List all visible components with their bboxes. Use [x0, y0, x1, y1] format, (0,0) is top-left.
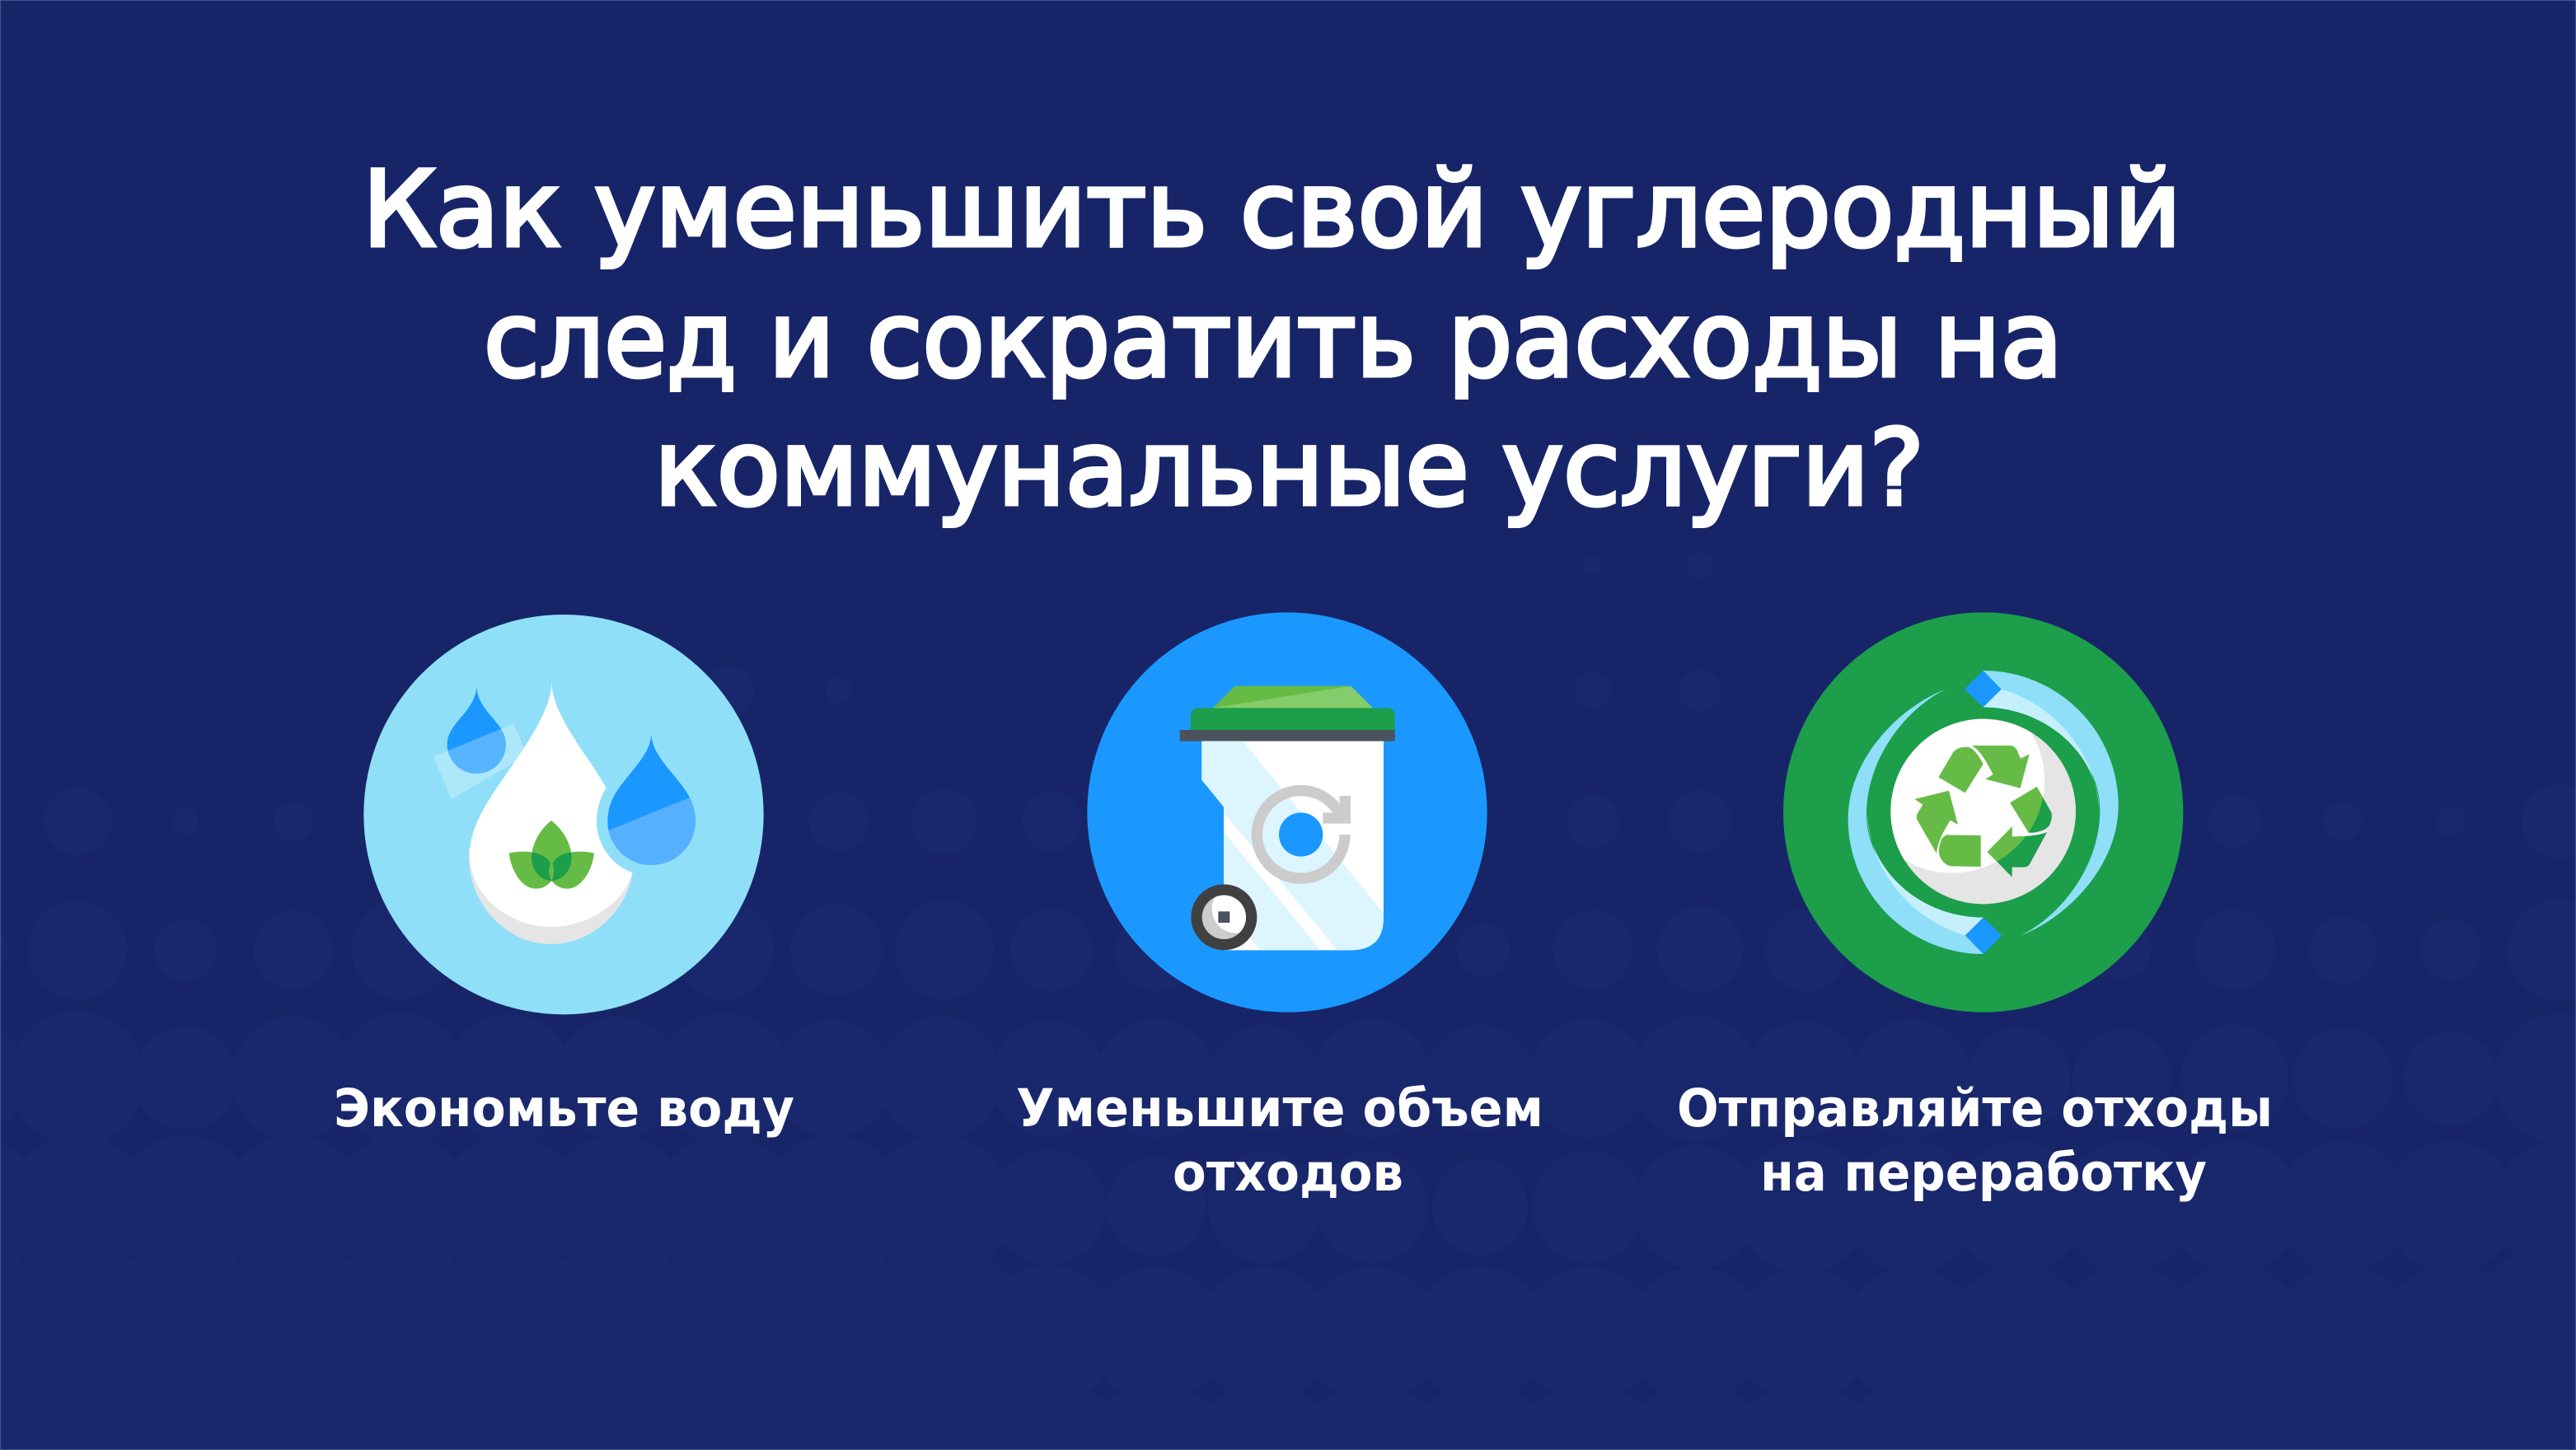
bin lid — [1180, 686, 1395, 741]
title: коммунальные услуги? — [654, 407, 1924, 529]
large white drop — [469, 681, 634, 944]
label: reduce waste — [1016, 1078, 1543, 1203]
label: reduce waste: отходов — [1173, 1143, 1403, 1203]
title: Как уменьшить свой углеродный — [363, 148, 2181, 270]
icon: recycling bin — [1087, 612, 1487, 1013]
icon: recycling symbol with arrows — [1783, 612, 2183, 1013]
label: save water: Экономьте воду — [334, 1078, 794, 1139]
icon: water drops with leaves — [363, 615, 764, 1014]
icon: leaves — [509, 821, 594, 889]
bin body — [1201, 741, 1384, 950]
wheel — [1191, 884, 1260, 950]
title: след и сократить расходы на — [484, 278, 2063, 400]
right water drop — [604, 732, 703, 876]
recycle symbol — [1914, 746, 2052, 877]
title — [363, 148, 2181, 529]
label: recycle waste: на переработку — [1760, 1143, 2207, 1203]
recycle arrow — [1257, 791, 1351, 878]
label: recycle waste — [1677, 1078, 2273, 1203]
white globe — [1890, 718, 2076, 905]
small water drop — [447, 685, 506, 774]
label: reduce waste: Уменьшите объем — [1016, 1078, 1543, 1139]
circular arrows — [1848, 671, 2119, 954]
label: recycle waste: Отправляйте отходы — [1677, 1078, 2273, 1139]
